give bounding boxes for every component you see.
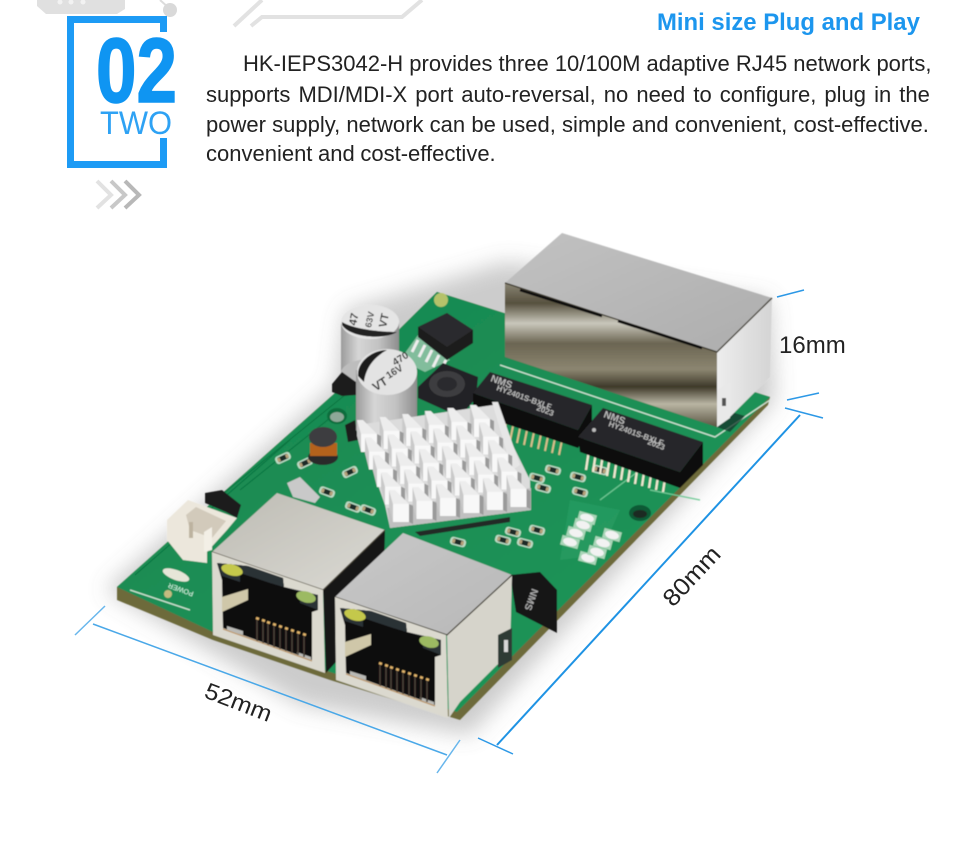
transformer chip NMS 1: NMS [489,373,514,392]
dimension: 52mm width: 52mm [201,677,276,727]
transformer chip NMS 1: HY2401S-BXLF [495,383,553,412]
drop shadow of board [105,262,775,735]
transformer chip NMS 2: HY2401S-BXLF [607,419,665,448]
badge: section number 02: TWO [100,105,172,141]
icon: grey chevrons [97,181,139,208]
transistor / regulator chip [400,313,473,372]
transformer chip NMS 2: 2023 [646,437,667,452]
capacitor 470 16V [356,349,417,438]
heading: Mini size Plug and Play [657,9,921,36]
paragraph text block: convenient and cost-effective. [206,141,496,166]
dimension: 16mm height: 16mm [779,332,846,359]
paragraph text block: HK-IEPS3042-H provides three 10/100M adaptive RJ45 network ports, [243,51,931,76]
LED row [560,511,622,565]
capacitor 470 16V: 16V [384,363,406,382]
small black chip behind port: NMS [521,587,540,612]
capacitor 47 63V: 63V [363,311,376,328]
PCB board [117,292,770,720]
capacitor 47 63V: VT [377,312,392,329]
small black chip behind port [510,572,557,633]
product photo: switch circuit board [105,233,775,735]
small black components near capacitors [205,372,358,518]
RJ45 port left [212,493,385,673]
white power connector: POWER [167,581,195,597]
inductor small [308,427,338,465]
transformer chip NMS 1: 2023 [535,403,556,418]
capacitor 47 63V [341,305,399,387]
paragraph text block: supports MDI/MDI-X port auto-reversal, no need to configure, plug in the [206,82,930,107]
capacitor 47 63V: 47 [347,312,361,327]
transformer chip NMS 1 [473,372,592,455]
large triple RJ45 connector [505,233,772,432]
dimension: 80mm length [478,408,823,754]
paragraph text block [206,51,931,166]
capacitor 470 16V: VT [370,374,391,394]
inductor large [418,363,478,417]
heatsink [357,402,531,536]
badge: section number 02 [70,20,177,164]
dimension: 80mm length: 80mm [658,541,726,612]
capacitor 470 16V: 470 [391,350,411,368]
white power connector [161,500,237,598]
RJ45 port right [335,533,512,718]
transformer chip NMS 2 [578,408,703,492]
dimension: 16mm height [777,290,846,400]
dimension: 52mm width [75,606,460,773]
transformer chip NMS 2: NMS [602,409,627,428]
background decoration: grey circuit motif [37,0,422,26]
paragraph text block: power supply, network can be used, simple and convenient, cost-effective. [206,112,929,137]
badge: section number 02: 02 [96,20,177,122]
